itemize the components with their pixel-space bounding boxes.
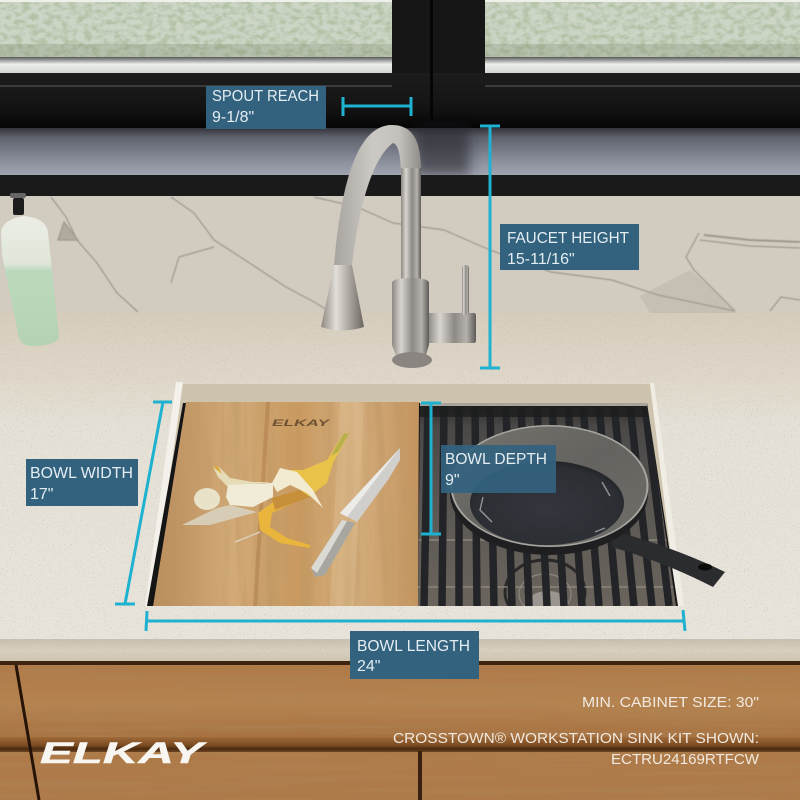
faucet body: [392, 278, 429, 358]
minimum cabinet size note: MIN. CABINET SIZE: 30": [582, 695, 759, 711]
dimension: spout reach: [206, 86, 411, 129]
faucet base: [392, 352, 432, 368]
product kit note: [393, 731, 759, 768]
label: faucet height: FAUCET HEIGHT: [507, 230, 629, 247]
label: spout reach: [206, 86, 326, 129]
board logo: ELKAY: [272, 418, 331, 428]
dimension: bowl length: [146, 610, 685, 679]
label: spout reach: 9-1/8": [212, 109, 254, 126]
arrow: bowl width: [115, 402, 172, 604]
frying pan: [450, 425, 725, 587]
faucet spout: [334, 125, 421, 265]
label: bowl length: 24": [357, 658, 380, 675]
dimension: faucet height: [480, 126, 639, 368]
product kit note: ECTRU24169RTFCW: [611, 752, 759, 768]
countertop: [0, 313, 800, 662]
label: faucet height: 15-11/16": [507, 251, 575, 268]
label: bowl width: [26, 459, 138, 506]
label: faucet height: [500, 224, 639, 270]
product kit note: CROSSTOWN® WORKSTATION SINK KIT SHOWN:: [393, 731, 759, 747]
cabinets: [0, 661, 800, 800]
label: spout reach: SPOUT REACH: [212, 88, 319, 105]
sink recess: [146, 384, 680, 606]
label: bowl width: 17": [30, 486, 53, 503]
arrow: spout reach: [343, 97, 411, 116]
arrow: faucet height: [480, 126, 500, 368]
faucet: [321, 125, 476, 368]
marble backsplash: [0, 196, 800, 314]
dimension: bowl width: [26, 402, 172, 604]
chef knife: [311, 448, 400, 577]
cutting board: [150, 402, 422, 606]
Elkay logo: ELKAY: [40, 737, 208, 770]
banana peel: [182, 433, 349, 548]
label: bowl depth: BOWL DEPTH: [445, 451, 547, 468]
drying rack: [418, 406, 676, 606]
soap bottle: [1, 193, 59, 346]
arrow: bowl length: [146, 610, 685, 631]
label: bowl depth: 9": [445, 472, 460, 489]
side lever: [428, 265, 476, 343]
pull-down spray head: [321, 265, 364, 330]
label: bowl depth: [441, 445, 556, 493]
label: bowl length: [350, 631, 479, 679]
pan handle: [612, 534, 725, 587]
label: bowl width: BOWL WIDTH: [30, 465, 133, 482]
label: bowl length: BOWL LENGTH: [357, 638, 470, 655]
window and greenery: [0, 0, 800, 197]
arrow: bowl depth: [421, 403, 441, 534]
dimension: bowl depth: [421, 403, 556, 534]
sink: [145, 382, 725, 624]
